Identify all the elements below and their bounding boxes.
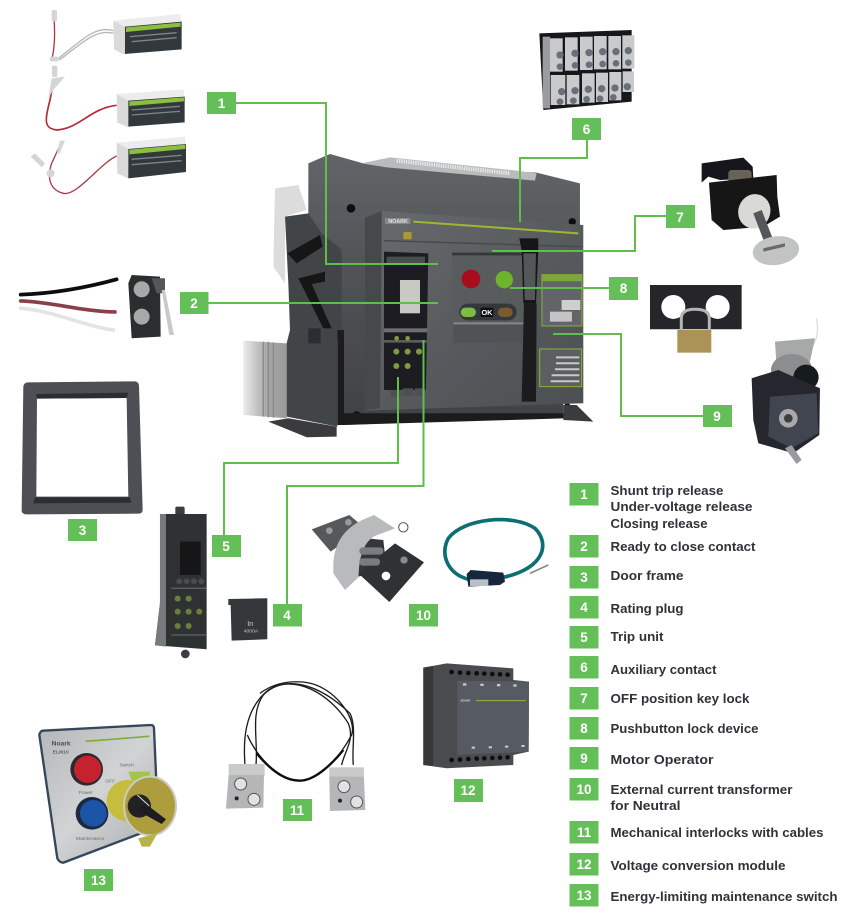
badge 11 <box>283 799 312 821</box>
display <box>180 542 201 575</box>
yellow switch collar <box>107 780 148 821</box>
legend item 3: Door frame <box>610 568 684 583</box>
motor cylinder <box>771 354 812 386</box>
legend item 11: Mechanical interlocks with cables <box>610 825 824 840</box>
leader 4 <box>287 340 424 604</box>
bracket <box>775 338 815 367</box>
rear housing <box>308 154 580 425</box>
badge 7 <box>666 205 695 228</box>
green on button <box>496 271 513 288</box>
key shaft <box>753 210 773 244</box>
badge 1 <box>207 92 236 114</box>
lamp captions: Switch <box>119 762 134 768</box>
legend <box>570 483 838 906</box>
output shaft <box>785 445 802 464</box>
adjustment dials <box>175 596 202 629</box>
panel brand: Noark <box>52 740 71 747</box>
coil lead <box>530 565 548 573</box>
leader 8 <box>510 287 609 289</box>
housing <box>155 514 207 649</box>
legend item 4: 4 <box>580 600 588 615</box>
badge 8: 8 <box>620 281 628 296</box>
legend item 11: 11 <box>577 825 592 840</box>
coil loop <box>445 520 543 579</box>
lock plate <box>650 285 742 329</box>
badge 6: 6 <box>583 122 591 137</box>
terminal holes <box>449 670 510 762</box>
external neutral transformer product 10 <box>312 515 424 602</box>
din housing <box>423 663 529 768</box>
breaker logo and green stripe <box>385 218 578 233</box>
block body <box>539 30 632 110</box>
small status icon <box>403 232 412 239</box>
mounting lugs <box>175 507 190 658</box>
frame inner edge <box>33 393 131 503</box>
cable loops <box>244 682 354 781</box>
badge 4 <box>273 604 302 626</box>
wires <box>46 17 117 194</box>
badge 5 <box>212 535 241 557</box>
legend item 7 <box>570 687 750 710</box>
ready to close micro switch product 2 <box>21 275 174 338</box>
legend item 13: 13 <box>576 888 592 903</box>
legend item 5: 5 <box>580 630 588 645</box>
left busbar <box>312 515 364 552</box>
badge 13: 13 <box>91 873 106 888</box>
side shade <box>423 666 433 766</box>
sensor arc <box>333 515 395 590</box>
legend item 9: Motor Operator <box>610 752 714 767</box>
red off button <box>462 270 480 288</box>
legend item 1 <box>570 483 752 531</box>
padlock body <box>677 330 711 353</box>
badge 1: 1 <box>218 96 226 111</box>
clamp label <box>470 579 488 586</box>
cables <box>21 279 117 330</box>
trip unit recess <box>384 252 428 397</box>
leader lines <box>208 103 703 604</box>
terminal columns <box>550 35 634 105</box>
right plate <box>329 767 365 811</box>
leader 5 <box>224 377 398 535</box>
leader 2 <box>208 302 438 304</box>
motor end <box>793 365 819 390</box>
maintenance lamp <box>76 797 108 830</box>
switch flap <box>128 772 150 781</box>
badge 3 <box>68 519 97 541</box>
rogowski coil product 10 <box>445 520 548 587</box>
ring pull <box>399 523 408 532</box>
badge 8 <box>609 277 638 300</box>
badge 11: 11 <box>290 803 305 818</box>
badge 7: 7 <box>676 210 684 225</box>
buttons <box>176 578 204 584</box>
left busbar terminal <box>243 341 287 418</box>
voltage conversion module product 12 <box>423 663 529 768</box>
panel brand: ELM10 <box>53 749 69 755</box>
terminal screws <box>556 47 632 105</box>
gear plate <box>768 393 818 448</box>
badge 3: 3 <box>79 523 87 538</box>
key cylinder <box>733 190 775 233</box>
rating label <box>542 275 582 326</box>
accessory label <box>540 349 582 387</box>
legend item 6: 6 <box>580 660 588 675</box>
legend item 5 <box>570 626 664 648</box>
badge 10: 10 <box>416 608 431 623</box>
badge 2 <box>180 292 208 314</box>
switch dial <box>123 777 175 836</box>
mounting holes <box>326 519 408 580</box>
badge 10 <box>409 604 438 626</box>
key bow <box>751 233 801 268</box>
rotary knob <box>128 794 166 824</box>
legend item 10: External current transformer <box>610 782 792 797</box>
white upper terminal <box>273 185 307 283</box>
terminal markers <box>463 683 525 749</box>
module C <box>117 137 186 178</box>
release modules product 1 <box>31 10 186 194</box>
power lamp <box>70 753 103 786</box>
cover tab <box>138 833 157 847</box>
leader 7 <box>492 216 666 251</box>
module logo stripe: NOARK <box>461 699 470 703</box>
output hub <box>779 409 798 428</box>
legend item 6 <box>570 656 717 678</box>
leader 6 <box>520 140 587 222</box>
legend item 1: Closing release <box>610 516 708 531</box>
rating text: In <box>247 619 253 628</box>
badge 12 <box>454 779 483 802</box>
trip unit product 5 <box>155 507 207 658</box>
side wall <box>155 514 166 647</box>
left plate <box>226 764 265 809</box>
left edge <box>543 37 550 108</box>
key slot <box>763 243 785 252</box>
wire terminals <box>31 10 65 177</box>
legend item 7: 7 <box>580 691 588 706</box>
badge 5: 5 <box>222 539 230 554</box>
lamp captions: OFF <box>105 778 115 784</box>
module B <box>117 89 185 127</box>
control recess <box>452 254 523 343</box>
legend item 9 <box>570 747 714 770</box>
badge 2: 2 <box>190 296 198 311</box>
rating text: 4000A <box>244 629 259 635</box>
lock handle <box>702 158 753 183</box>
charging handle <box>519 238 538 402</box>
legend item 3: 3 <box>580 570 588 585</box>
padlock shackle <box>681 309 709 330</box>
lamp captions: Power <box>79 790 93 796</box>
legend item 7: OFF position key lock <box>610 691 750 706</box>
legend item 12: 12 <box>576 857 592 872</box>
right busbar <box>358 543 424 602</box>
legend item 8: Pushbutton lock device <box>610 721 758 736</box>
dark core <box>350 537 387 577</box>
mounting feet <box>268 405 593 437</box>
legend item 12 <box>570 853 786 876</box>
interlock cables product 11 <box>226 682 365 811</box>
legend item 1: Shunt trip release <box>610 483 724 498</box>
legend item 13: Energy-limiting maintenance switch <box>610 889 838 904</box>
legend item 10: for Neutral <box>610 798 680 813</box>
legend item 8: 8 <box>580 721 588 736</box>
lower base <box>343 413 567 425</box>
top connector strip <box>362 157 537 181</box>
screw heads <box>347 204 576 420</box>
legend item 2: 2 <box>580 539 588 554</box>
lock body <box>709 175 780 230</box>
legend item 4: Rating plug <box>610 601 684 616</box>
faceplate <box>457 681 529 755</box>
clear cover edge <box>124 777 176 835</box>
pushbutton lock product 8 <box>650 285 742 353</box>
barrel <box>728 170 752 183</box>
badge 12: 12 <box>460 783 476 798</box>
panel brand <box>52 736 149 755</box>
rating plug product 4 <box>228 598 267 641</box>
main air circuit breaker <box>243 154 593 437</box>
badge 9 <box>703 405 732 427</box>
legend item 3 <box>570 566 684 588</box>
conductor rods <box>359 547 383 566</box>
legend item 13 <box>570 884 838 906</box>
left side chassis <box>285 213 344 427</box>
leader 9 <box>553 334 703 416</box>
key lock product 7 <box>702 158 801 268</box>
divider <box>171 588 207 635</box>
gear housing <box>752 370 820 453</box>
legend item 8 <box>570 717 758 740</box>
switch body <box>128 275 174 338</box>
legend item 10: 10 <box>576 782 592 797</box>
lamp captions: Maintenance <box>76 836 105 842</box>
legend item 1: Under-voltage release <box>610 499 752 514</box>
badge 13 <box>84 869 113 891</box>
legend item 9: 9 <box>580 751 588 766</box>
status indicator bar <box>459 304 517 320</box>
door frame product 3 <box>22 381 143 514</box>
hub center <box>784 414 793 423</box>
coil clamp <box>467 570 505 587</box>
white cable <box>810 318 818 350</box>
leader 1 <box>236 103 438 264</box>
legend item 11 <box>570 821 824 844</box>
badge 6 <box>572 118 601 140</box>
legend item 5: Trip unit <box>610 629 664 644</box>
lamp captions <box>76 762 134 842</box>
auxiliary contact product 6 <box>539 30 634 110</box>
legend item 2 <box>570 535 756 558</box>
number badges on diagram <box>68 92 732 891</box>
legend item 10 <box>570 778 792 813</box>
rating text <box>244 619 259 635</box>
legend item 4 <box>570 596 684 618</box>
legend item 12: Voltage conversion module <box>610 858 786 873</box>
badge 9: 9 <box>713 409 721 424</box>
status indicator bar: OK <box>481 308 493 317</box>
motor operator product 9 <box>752 318 820 464</box>
legend item 6: Auxiliary contact <box>610 662 717 677</box>
legend item 2: Ready to close contact <box>610 539 756 554</box>
badge 4: 4 <box>283 608 291 623</box>
energy limiting maintenance switch product 13 <box>39 725 176 863</box>
breaker logo and green stripe: NOARK <box>388 219 408 225</box>
legend item 1: 1 <box>580 487 588 502</box>
module A <box>113 14 182 55</box>
front panel <box>365 211 583 411</box>
panel <box>39 725 158 863</box>
